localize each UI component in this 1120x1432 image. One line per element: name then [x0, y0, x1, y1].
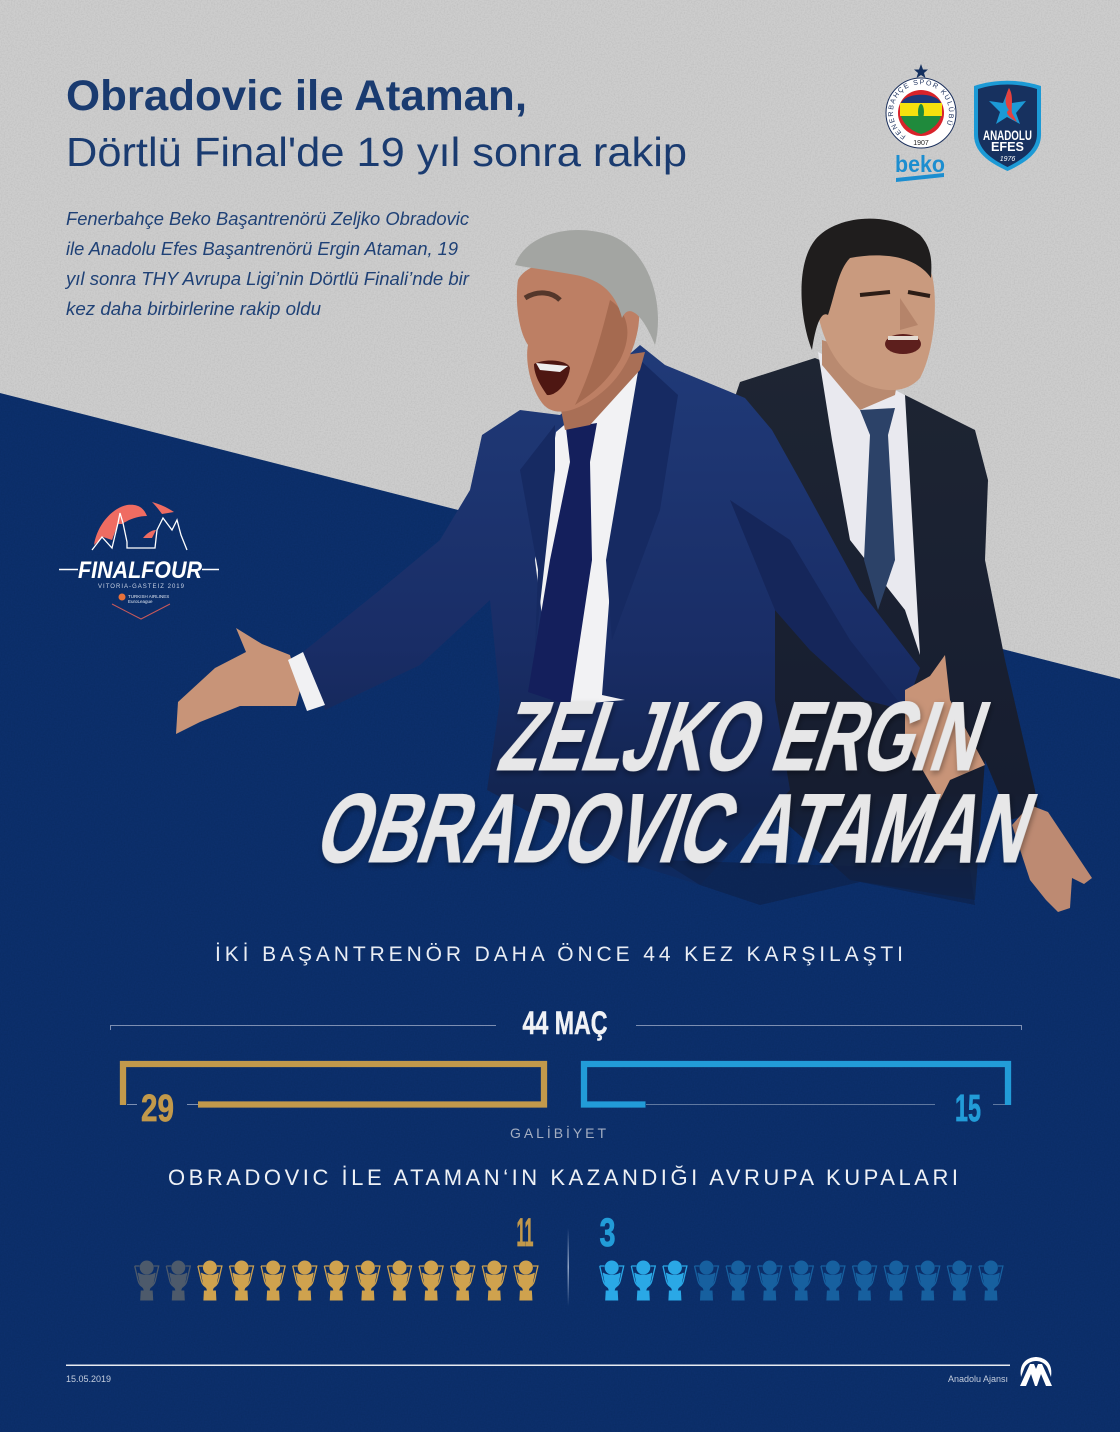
Obradovic shirt cuff	[288, 652, 325, 711]
Obradovic shirt	[535, 360, 640, 705]
intro paragraph: Fenerbahçe Beko Başantrenörü Zeljko Obradovic	[66, 208, 470, 229]
Obradovic face	[517, 259, 639, 412]
intro paragraph: kez daha birbirlerine rakip oldu	[66, 298, 321, 319]
Ataman suit	[700, 358, 1038, 900]
footer: Anadolu Ajansı	[948, 1374, 1008, 1384]
Obradovic suit and arms	[303, 345, 920, 885]
bar: Obradovic wins	[123, 1064, 544, 1130]
heading: European cups: OBRADOVIC İLE ATAMAN‘IN KAZANDIĞI AVRUPA KUPALARI	[168, 1165, 958, 1190]
Ataman mouth	[885, 334, 921, 354]
total matches label: 44 MAÇ	[522, 1005, 608, 1041]
Ataman face	[815, 250, 935, 390]
logo: Final Four: TURKISH AIRLINES	[128, 594, 169, 599]
Ataman eyes	[860, 292, 930, 296]
intro paragraph: ile Anadolu Efes Başantrenörü Ergin Ataman, 19	[66, 238, 458, 259]
Ataman nose shadow	[900, 298, 918, 330]
text: 11	[516, 1211, 534, 1255]
photo: Zeljko Obradovic	[176, 230, 985, 885]
Obradovic left hand	[176, 628, 300, 734]
title: Dörtlü Final'de 19 yıl sonra rakip	[66, 129, 687, 175]
title	[66, 72, 687, 175]
footer	[66, 1357, 1052, 1386]
player names	[305, 682, 1049, 883]
logo: Anadolu Efes: EFES	[991, 139, 1024, 154]
logo: Anadolu Efes: ANADOLU	[983, 127, 1032, 143]
trophies: Obradovic	[135, 1261, 538, 1300]
title: Obradovic ile Ataman,	[66, 72, 527, 120]
Ataman neck	[822, 340, 900, 410]
trophies: Ataman	[600, 1261, 1003, 1300]
Ataman hand	[1012, 805, 1092, 912]
logo: Final Four: FINALFOUR	[78, 557, 203, 584]
Obradovic lapels	[520, 360, 678, 650]
logo: Final Four: EuroLeague	[128, 599, 153, 604]
heading: head-to-head: İKİ BAŞANTRENÖR DAHA ÖNCE 44 KEZ KARŞILAŞTI	[215, 943, 903, 966]
logo: Anadolu Efes	[974, 81, 1041, 171]
bar: Obradovic wins: 29	[141, 1088, 174, 1130]
logo: Fenerbahçe Beko: 1907	[913, 140, 929, 147]
logo: Final Four: VITORIA-GASTEIZ 2019	[98, 584, 185, 590]
intro paragraph: yıl sonra THY Avrupa Ligi’nin Dörtlü Finali’nde bir	[64, 268, 470, 289]
logo: Fenerbahçe Beko: FENERBAHÇE SPOR KULÜBÜ	[888, 80, 955, 140]
brush fade under figures	[660, 860, 975, 905]
Obradovic hair	[515, 230, 658, 345]
photo: Ergin Ataman	[700, 219, 1092, 912]
count: Ataman cups: 3	[600, 1211, 616, 1255]
bar: Ataman wins: 15	[955, 1088, 981, 1130]
centre divider	[568, 1228, 569, 1306]
Ataman shirt	[818, 352, 920, 655]
Obradovic brow	[525, 293, 560, 300]
logo: Fenerbahçe Beko: beko	[895, 151, 945, 177]
background: navy diagonal lower panel	[0, 393, 1120, 1432]
Obradovic mouth	[534, 361, 570, 395]
footer: 15.05.2019	[66, 1374, 111, 1384]
Ataman tie	[860, 408, 895, 610]
Ataman hair	[801, 219, 931, 350]
logo: Fenerbahçe Beko	[886, 64, 956, 182]
Obradovic neck	[560, 352, 645, 430]
total matches label	[110, 1005, 1022, 1041]
Obradovic right hand	[905, 655, 985, 800]
label: wins: GALİBİYET	[510, 1124, 606, 1141]
Obradovic teeth	[536, 363, 568, 372]
logo: Anadolu Efes: 1976	[1000, 156, 1015, 163]
intro paragraph	[64, 208, 470, 319]
Obradovic sleeve shadow	[730, 500, 905, 710]
Obradovic tie	[528, 423, 597, 706]
Obradovic cheek shadow	[575, 300, 627, 405]
bar: Ataman wins	[584, 1064, 1008, 1130]
logo: Final Four	[59, 502, 219, 619]
